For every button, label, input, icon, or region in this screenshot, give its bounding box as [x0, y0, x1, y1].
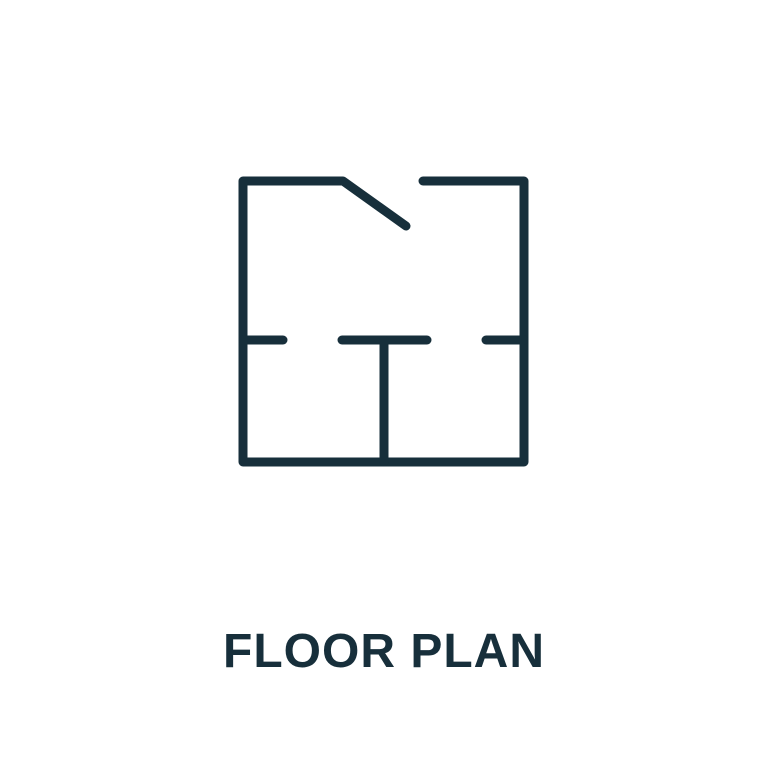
- title: FLOOR PLAN: [223, 625, 545, 678]
